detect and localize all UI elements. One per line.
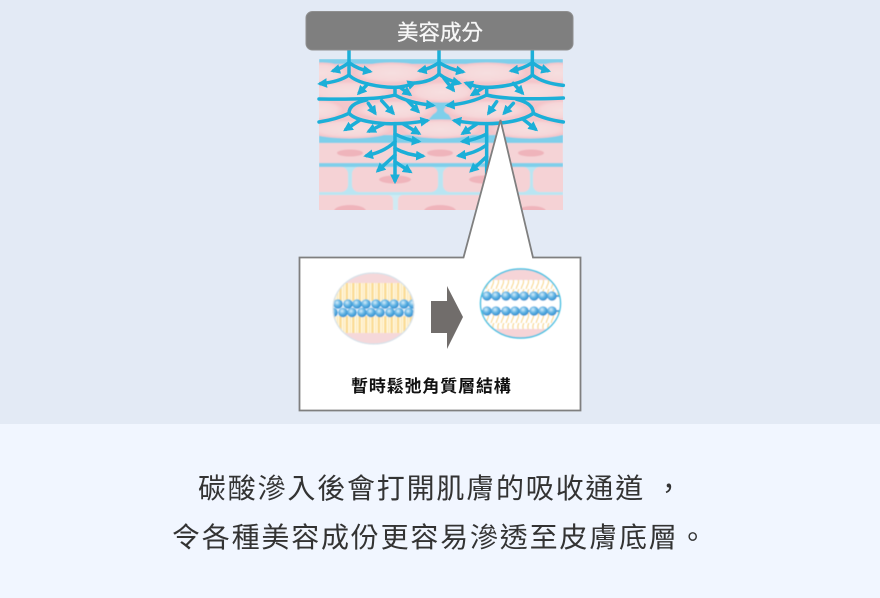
header bar: 美容成分	[397, 21, 483, 45]
callout caption: 暫時鬆弛角質層結構	[351, 376, 512, 396]
arrow tree: left	[319, 50, 432, 181]
skin layer illustration	[319, 59, 563, 210]
arrow: before to after	[431, 286, 463, 349]
zoom callout box with pointer	[300, 120, 580, 410]
arrow tree: centre	[415, 50, 462, 90]
lower background panel	[0, 424, 880, 598]
body text line 1: 碳酸滲入後會打開肌膚的吸收通道 ，	[198, 473, 684, 504]
body text	[172, 473, 708, 553]
upper background panel	[0, 0, 880, 424]
blue penetration arrows	[319, 50, 563, 181]
body text line 2: 令各種美容成份更容易滲透至皮膚底層。	[172, 522, 708, 553]
icon: stratum corneum before	[328, 272, 418, 346]
icon: stratum corneum after	[479, 268, 563, 340]
header bar	[306, 12, 573, 50]
arrow tree: right	[448, 50, 563, 177]
